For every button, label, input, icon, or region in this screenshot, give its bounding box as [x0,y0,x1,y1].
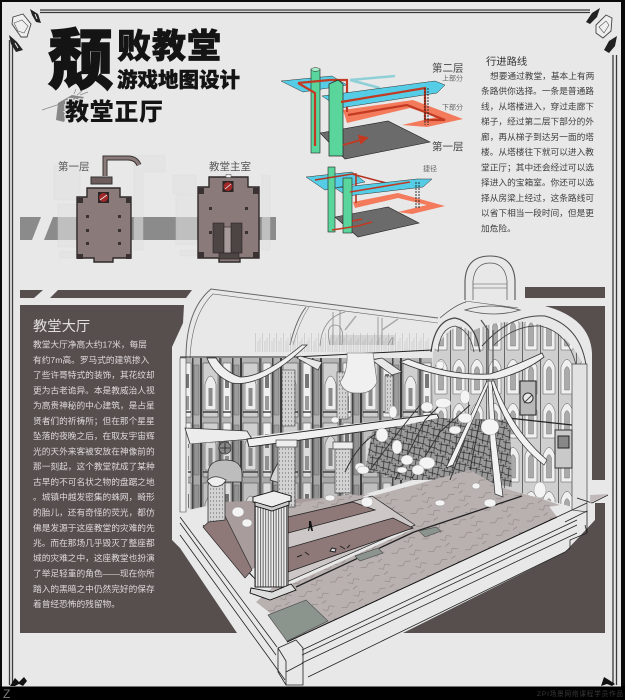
ghost outlines of adjacent rooms [54,155,270,258]
plan small room [91,177,112,184]
central nave light bands [280,496,415,585]
apse side wall [572,364,587,512]
lower columns [276,440,353,507]
ink splatter behind subtitle [42,89,88,122]
debris strands [345,400,480,480]
apse ledge [508,418,572,425]
text block: hall description: 佛是发源于这座教堂的灾难的先 [33,522,155,533]
text block: route description: 加危险。 [481,222,516,234]
plinth ledge fill [590,494,608,503]
label: first floor: 第一层 [58,160,90,173]
small drape [297,356,402,375]
apse outer arch [431,316,586,365]
watermark: ZPI场景网络课程学员作品 [537,689,623,698]
corner ornament: bottom-right [601,677,615,686]
diagram: grey ground floor [335,207,419,237]
text block: hall description: 古早的不可名状之物的盘踞之地 [33,476,155,487]
sunken pool lower [288,518,413,572]
diagram: salmon lower level [343,100,463,127]
diagram: direction arrow [343,136,367,145]
subtitle: 教堂正厅 [65,99,163,126]
left wall end pilaster [180,358,186,512]
title [48,24,240,97]
label: shortcut: 捷径 [423,164,437,173]
lower left pavement [203,510,252,578]
route diagram: shortcut [306,164,445,237]
front floor divider line [296,496,522,587]
text block: hall description: 踏入的黑暗之中仍然完好的保存 [33,583,155,594]
bottom black bar [0,686,625,700]
plan pillars [198,188,259,258]
front plinth bands [180,495,608,685]
title: big character: 颓 [48,24,113,97]
diagram: red upper route [315,174,390,203]
text block: route description: 廊，再从梯子到达另一面的塔 [481,131,594,142]
faint background sketch [255,310,430,354]
text block: hall description: 教堂大厅净高大约17米，每层 [33,338,147,350]
text block: hall description: 。城镇中越发密集的蛛网，畸形 [33,491,155,502]
grey band behind plans [20,217,276,240]
text block: route description: 想要通过教堂，基本上有两 [490,70,595,81]
plan pipe corridor [105,158,139,176]
cupola [440,256,520,318]
text block: hall description [33,318,155,609]
text block: route description: 以省下相当一段时间，但是更 [481,207,594,218]
foreground fluted column [250,491,296,600]
plan altar icon [98,192,109,203]
text block: route description: 条路供你选择。一条是普通路 [481,85,594,96]
apse back wall with arches [432,322,583,510]
corner ornament: top-right gem and feathers [586,8,617,53]
diagram: pale walkway [350,76,395,88]
roof vault [186,289,438,358]
diagram: right green tower [329,80,343,156]
text block: hall description: 坠落的夜晚之后，在取友宇宙辉 [33,430,155,441]
text block: hall description: 更为古老诡异。本是教威治人视 [33,384,155,395]
title: first line: 败教堂 [117,28,221,66]
label: first floor: 第一层 [432,140,464,153]
text block: route description: 择进入的宝箱室。你还可以选 [481,177,594,188]
diagram: left cyan plane [281,76,347,92]
cutaway illustration: ruined church hall [180,256,608,685]
text block: hall description: 贤者们的祈祷所；但在那个星星 [33,415,155,426]
diagram: left green tower [328,167,335,232]
plan altar icon [222,181,234,192]
text block: hall description: 光的天外来客被安放在神像前的 [33,445,155,456]
lower arch ornaments [208,442,290,486]
route diagram: full route [281,62,464,159]
diagram: red route upper [298,80,347,146]
diagram: left cyan plane [306,172,365,190]
altar shrine [520,381,572,468]
central debris tangle [365,418,512,487]
title: second line: 游戏地图设计 [117,68,240,92]
text block: hall description: 兆。而在那场几乎毁灭了整座都 [33,537,155,548]
back floor [350,470,560,530]
upper wall panels [185,358,432,437]
text block: hall description: 了些许哥特式的装饰，其花纹却 [33,369,155,380]
diagram: ladder [416,182,419,208]
panel: hall dark backdrop [20,305,605,633]
tiny figure [308,521,313,531]
sunken pool upper [288,502,375,533]
text block: route description: 楼。从塔楼往下就可以进入教 [481,146,594,157]
plan pillars [77,198,131,259]
text block: route description: 线，从塔楼进入，穿过走廊下 [481,100,594,111]
text block: route description [481,55,595,234]
floor plan: main chamber [198,160,259,262]
plan door [226,174,231,178]
hanging curtain [340,353,377,393]
dark strips above hall panel [20,287,605,298]
diagram: right green tower [343,178,352,233]
plan body [198,177,259,262]
upper columns [282,370,393,426]
falling ribbons [446,381,547,497]
text block: hall description: 了举足轻重的角色——现在你所 [33,568,155,578]
upper wall top edge [180,350,432,357]
label: second floor: 第二层 [432,62,464,74]
broken column [207,477,226,522]
floor plan: first floor [58,158,139,262]
plan pews [213,223,242,259]
floor front edge [287,517,557,642]
text block: route description: 梯子，经过第二层下部分的外 [481,116,594,127]
lower wall panels [188,418,440,510]
diagram: salmon lower level [353,193,445,214]
diagram: ladder [425,88,428,125]
corner ornament: top-left gem and feathers [9,9,41,52]
plan pipe inner [105,158,139,176]
text block: hall description: 有约7m高。罗马式的建筑掺入 [33,354,150,365]
rubble chunks [232,361,546,527]
diagram: left green tower [311,68,320,153]
floor grates [268,527,441,641]
text block: hall description: 着曾经恐怖的残留物。 [33,598,120,609]
diagram: blue and red arrows [332,182,410,230]
heading: hall: 教堂大厅 [33,318,90,335]
label: upper part: 上部分 [442,74,463,82]
diagram: right cyan plane [322,81,445,108]
text block: route description: 择从房梁上经过，这条路线可 [481,192,594,203]
diagram: right cyan plane [335,179,432,196]
diagram: red route lower [341,88,445,120]
label: lower part: 下部分 [442,102,463,112]
label: main chamber: 教堂主室 [209,160,251,173]
balcony rail [247,414,440,447]
front floor strip [256,497,557,642]
lower wall shade [188,418,440,510]
text block: route description: 堂正厅；其中还会经过可以选 [481,161,594,172]
corner ornament: bottom-left [10,677,27,686]
plan main body [77,188,131,262]
text block: hall description: 城的灾难之中，这座教堂也扮演 [33,552,155,563]
text block: hall description: 的胎儿，还有奇怪的荧光，都仿 [33,506,155,517]
text block: hall description: 为高贵神秘的中心建筑，是占星 [33,400,155,411]
side floor by wall [222,494,370,570]
left drape [207,345,307,384]
diagram: grey ground floor [320,121,430,159]
heading: route: 行进路线 [486,55,527,68]
text block: hall description: 那一刻起，这个教堂就成了某种 [33,461,155,472]
pool debris [297,545,350,557]
upper balcony rail left [185,428,252,444]
right drape [400,353,544,379]
hanging pole [481,320,493,380]
